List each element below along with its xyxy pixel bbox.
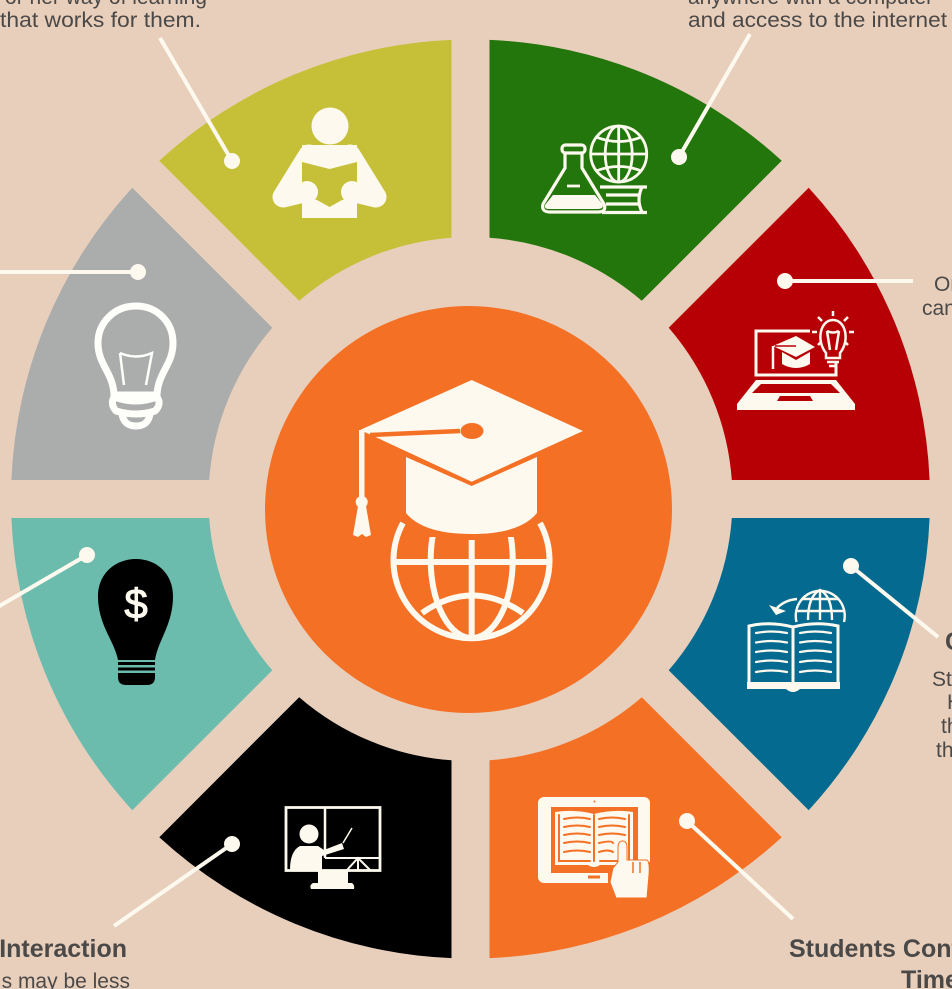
leader line: blue	[843, 558, 938, 637]
text block: upper left caption	[0, 0, 207, 32]
segment: orange, tablet	[490, 697, 793, 958]
text block: right caption, blue segment	[932, 628, 952, 762]
icon: person reading a book	[283, 108, 376, 218]
text block: upper right caption: and access to the internet	[688, 9, 947, 32]
text block: right caption, blue segment: St	[932, 668, 952, 691]
leader line: olive	[160, 38, 240, 169]
wedge: gray	[11, 188, 272, 480]
icon: laptop with cap and light bulb	[737, 311, 855, 410]
segment: gray, light bulb	[0, 188, 272, 480]
segment: red, laptop	[669, 188, 930, 480]
segment: green, science and globe	[490, 34, 782, 301]
leader line: red	[777, 273, 913, 289]
center circle with graduation cap and globe	[265, 306, 672, 713]
icon: graduation cap	[353, 380, 583, 537]
segment: teal, money bulb	[0, 518, 272, 810]
icon: black bulb with dollar sign: $	[124, 580, 148, 627]
leader line: orange	[679, 813, 793, 919]
text block: upper right caption	[688, 0, 947, 32]
segment: black, teacher	[114, 697, 452, 958]
leader line: teal	[0, 547, 95, 608]
text block: students control their time	[789, 935, 952, 989]
icon: globe	[390, 522, 552, 642]
wedge: blue	[669, 518, 930, 810]
text block: upper left caption: that works for them.	[0, 9, 201, 32]
icon: teacher at a whiteboard	[286, 807, 380, 889]
icon: black bulb with dollar sign	[98, 559, 173, 685]
center disc	[265, 306, 672, 713]
wedge: olive	[159, 40, 452, 301]
leader line: black	[114, 836, 240, 926]
icon: flask, globe and books	[543, 126, 647, 212]
icon: tablet with book and pointing hand	[538, 797, 654, 898]
icon: open book with globe	[747, 590, 845, 692]
wedge: teal	[11, 518, 272, 810]
leader line: gray	[0, 264, 146, 280]
icon: outlined light bulb	[98, 306, 173, 426]
wedge: orange	[490, 697, 782, 958]
wedge: red	[669, 188, 930, 480]
text block: less interaction	[0, 935, 130, 989]
leader line: green	[671, 34, 750, 165]
text block: less interaction: Interaction	[0, 935, 127, 963]
segment: olive, reading student	[159, 38, 452, 301]
wedge: black	[159, 697, 452, 958]
segment: blue, open book	[669, 518, 938, 810]
wedge: green	[490, 40, 782, 301]
text block: right caption, red segment	[922, 273, 952, 320]
